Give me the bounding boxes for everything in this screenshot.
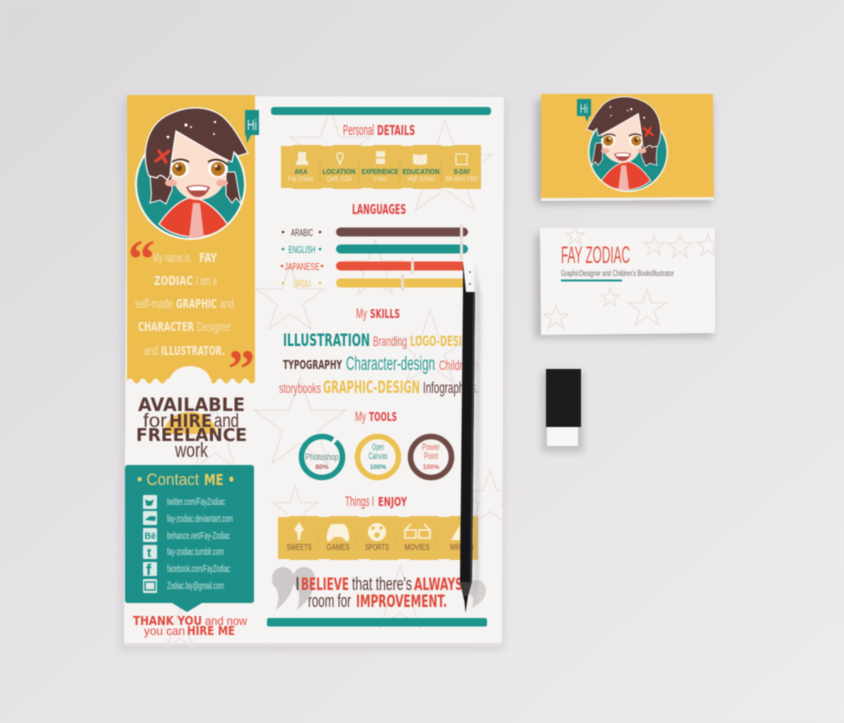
- detail labels: EXPERIENCE: [362, 167, 398, 176]
- contact links: twitter.com/FayZodiac: [167, 497, 225, 508]
- belief quote: room for: [308, 591, 351, 611]
- skills word cloud: LOGO-DESIGN: [410, 334, 476, 350]
- introduction text: FAY: [199, 251, 217, 265]
- contact links: facebook.com/FayZodiac: [167, 564, 230, 575]
- introduction text: and: [144, 343, 158, 358]
- availability headline: for: [143, 411, 168, 432]
- heading: tools: [355, 408, 397, 424]
- speech bubble: Hi: Hi: [247, 117, 257, 134]
- thank you note: HIRE ME: [187, 624, 235, 638]
- language bullets: [281, 231, 323, 284]
- language labels: ENGLISH: [288, 245, 316, 256]
- contact icons: [143, 495, 157, 593]
- heading: personal details: DETAILS: [377, 124, 415, 139]
- tool: power point: Point: [424, 451, 438, 461]
- icon: writing: [451, 525, 460, 540]
- detail labels: LOCATION: [322, 167, 356, 176]
- contact links: behance.net/Fay-Zodiac: [167, 531, 230, 542]
- panel: personal details band: [281, 145, 481, 189]
- business card: yellow front: [536, 94, 714, 204]
- enjoy labels: MOVIES: [404, 543, 430, 552]
- paper: resume sheet: [120, 96, 519, 650]
- belief quote: IMPROVEMENT.: [356, 592, 447, 612]
- skills word cloud: Infographics.: [423, 380, 479, 397]
- icon: profile: [296, 152, 308, 165]
- heading: tools: TOOLS: [369, 410, 397, 424]
- availability headline: HIRE: [169, 411, 212, 432]
- introduction text: I am a: [196, 273, 217, 288]
- card speech bubble: Hi: [580, 101, 588, 116]
- tool rings: [293, 428, 452, 486]
- detail labels: EDUCATION: [402, 167, 440, 176]
- introduction text: ILLUSTRATOR.: [161, 344, 225, 358]
- thank you note: you can: [144, 624, 185, 638]
- icon: ice cream: [294, 522, 304, 540]
- enjoy labels: WRITING: [450, 543, 474, 552]
- skills word cloud: Branding: [373, 333, 407, 349]
- bottom teal bar: [267, 618, 487, 626]
- contact icons: f: [146, 562, 152, 579]
- introduction text: [135, 250, 234, 358]
- speech bubble: Hi: [245, 110, 259, 143]
- availability headline: AVAILABLE: [138, 394, 245, 416]
- icon: 3d glasses: [405, 524, 430, 538]
- panel: enjoy band: [278, 516, 478, 560]
- heading: skills: SKILLS: [370, 307, 400, 321]
- tool: open canvas: [358, 436, 398, 478]
- heading: skills: [356, 305, 400, 321]
- icon: soccer ball: [368, 523, 386, 541]
- quote mark open: “: [128, 229, 155, 289]
- contact heading: ME •: [204, 471, 235, 489]
- tool: open canvas: Open: [372, 442, 384, 452]
- icon: calendar: [456, 154, 467, 164]
- heading: things i enjoy: ENJOY: [378, 495, 407, 509]
- language labels: JAPANESE: [284, 262, 320, 273]
- belief quote: that there's: [352, 574, 412, 594]
- heading: personal details: Personal: [343, 122, 374, 139]
- introduction text: and: [220, 296, 234, 311]
- detail values: Fay Zodiac: [288, 176, 314, 183]
- enjoy labels: SPORTS: [365, 543, 389, 552]
- availability headline: and: [214, 411, 239, 432]
- belief quote: ALWAYS: [414, 575, 463, 595]
- panel: contact: [125, 465, 254, 612]
- availability headline: [136, 394, 247, 462]
- introduction text: ZODIAC: [154, 274, 193, 288]
- white dome: [168, 366, 212, 386]
- contact icons: t: [147, 545, 152, 560]
- introduction text: GRAPHIC: [176, 297, 217, 311]
- card teal rule: [561, 280, 622, 282]
- icon: location pin: [337, 153, 343, 164]
- skills word cloud: [279, 331, 483, 398]
- introduction text: CHARACTER: [138, 320, 194, 334]
- quote mark close: ”: [228, 339, 255, 399]
- contact links: fay-zodiac.deviantart.com: [167, 514, 233, 525]
- thank you note: [133, 614, 247, 638]
- belief quote: BELIEVE: [301, 575, 349, 595]
- skills word cloud: ILLUSTRATION: [283, 331, 370, 351]
- tool: power point: 100%: [423, 464, 440, 471]
- card subtitle: GraphicDesigner and Children's BooksIllustrator: [561, 269, 674, 278]
- panel: yellow profile: [127, 95, 259, 399]
- enjoy labels: GAMES: [326, 543, 350, 552]
- tool: power point: Power: [422, 442, 440, 452]
- language labels: URDU: [294, 279, 310, 290]
- belief quote: [272, 567, 486, 612]
- contact links: [167, 497, 233, 592]
- stationery mockup scene: [0, 0, 716, 650]
- detail values: [288, 176, 479, 183]
- tool: open canvas: 100%: [370, 464, 387, 471]
- business card: white back: [535, 226, 719, 338]
- contact links: Zodiac.fay@gmail.com: [167, 581, 224, 592]
- enjoy labels: [286, 543, 474, 552]
- business card: white back: FAY ZODIAC: [561, 242, 630, 269]
- introduction text: My name is: [153, 250, 190, 265]
- tool: open canvas: Canvas: [368, 451, 388, 461]
- contact icons: Bē: [144, 531, 156, 541]
- avatar: [135, 108, 248, 240]
- skills word cloud: TYPOGRAPHY: [283, 358, 342, 372]
- skills word cloud: Character-design: [346, 354, 435, 375]
- detail labels: [294, 167, 470, 176]
- eraser: [542, 369, 583, 452]
- availability headline: work: [174, 440, 209, 462]
- language labels: ARABIC: [291, 228, 313, 239]
- tool: photoshop: [293, 428, 351, 486]
- heading: tools: My: [355, 408, 366, 424]
- contact heading: • Contact: [137, 470, 199, 489]
- heading: skills: My: [356, 305, 367, 321]
- detail labels: B-DAY: [454, 167, 470, 176]
- detail values: 3 Years: [374, 176, 387, 183]
- skills word cloud: GRAPHIC-DESIGN: [323, 378, 420, 398]
- tool: power point: [410, 436, 452, 478]
- availability headline: FREELANCE: [136, 425, 247, 446]
- detail values: 6th April 1992: [446, 176, 479, 183]
- introduction text: Designer: [197, 319, 231, 334]
- pencil: [460, 255, 480, 614]
- skills word cloud: storybooks: [279, 380, 321, 396]
- detail labels: AKA: [294, 167, 308, 176]
- top teal bar: [271, 107, 491, 115]
- thank you note: and now: [205, 614, 247, 628]
- card speech bubble: [577, 99, 591, 122]
- contact links: fay-zodiac.tumblr.com: [167, 547, 224, 558]
- introduction text: self-made: [135, 296, 173, 311]
- icon: book: [413, 154, 427, 165]
- skills word cloud: Children's: [439, 357, 479, 373]
- detail values: High School: [408, 176, 435, 183]
- icon: game controller: [327, 524, 349, 541]
- chart: language bars: [281, 224, 468, 291]
- enjoy labels: SWEETS: [286, 543, 312, 552]
- tool: photoshop: Photoshop: [306, 452, 338, 462]
- heading: things i enjoy: Things I: [345, 493, 374, 509]
- icon: briefcase: [376, 151, 385, 164]
- thank you note: THANK YOU: [133, 614, 202, 628]
- heading: languages: LANGUAGES: [352, 203, 406, 218]
- language labels: [284, 228, 320, 290]
- detail values: Qatif, KSA: [326, 176, 352, 183]
- belief quote: I: [295, 574, 300, 594]
- tool: photoshop: 80%: [315, 464, 329, 471]
